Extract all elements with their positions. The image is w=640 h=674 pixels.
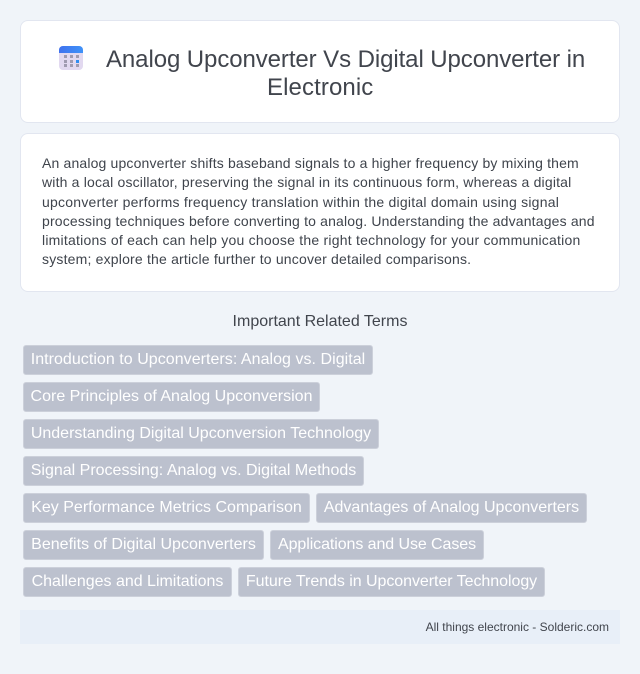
- tag: benefits digital: [23, 530, 264, 560]
- text block: description: limitations of each can help you choose the right technology for your communication: [42, 232, 581, 248]
- tag: performance metrics: [23, 493, 310, 523]
- tag: challenges: [23, 567, 232, 597]
- tag: digital upconversion: [23, 419, 379, 449]
- tag: digital upconversion: Understanding Digital Upconversion Technology: [31, 425, 371, 442]
- tag: future trends: Future Trends in Upconverter Technology: [246, 573, 537, 590]
- footer text: All things electronic - Solderic.com: [426, 620, 609, 634]
- tag: advantages analog: [316, 493, 587, 523]
- panel: title card: [20, 20, 620, 123]
- tag: future trends: [238, 567, 545, 597]
- tag: signal processing: [23, 456, 364, 486]
- tag: core principles: Core Principles of Analog Upconversion: [31, 388, 312, 405]
- tag: performance metrics: Key Performance Metrics Comparison: [31, 499, 302, 516]
- tag: applications: [270, 530, 484, 560]
- text block: description: An analog upconverter shifts baseband signals to a higher frequency by mixing them: [42, 155, 579, 171]
- footer bar: [20, 610, 620, 644]
- tag: introduction: Introduction to Upconverters: Analog vs. Digital: [31, 351, 365, 368]
- tag: applications: Applications and Use Cases: [278, 536, 476, 553]
- text block: description: [42, 155, 595, 267]
- tag: challenges: Challenges and Limitations: [32, 573, 223, 590]
- heading: title line 2: Electronic: [267, 74, 373, 101]
- panel: description card: [20, 133, 620, 292]
- text block: description: processing techniques before converting to analog. Understanding the advantages and: [42, 213, 595, 229]
- text block: description: upconverter performs frequency translation within the digital domain using signal: [42, 194, 559, 210]
- tag: signal processing: Signal Processing: Analog vs. Digital Methods: [31, 462, 356, 479]
- icon: calendar grid: [59, 46, 83, 70]
- text block: description: system; explore the article further to uncover detailed comparisons.: [42, 251, 471, 267]
- tag: core principles: [23, 382, 320, 412]
- tag: advantages analog: Advantages of Analog Upconverters: [324, 499, 579, 516]
- tag: introduction: [23, 345, 373, 375]
- heading: important related terms: Important Related Terms: [233, 313, 407, 330]
- text block: description: with a local oscillator, preserving the signal in its continuous form, whereas a digital: [42, 174, 571, 190]
- heading: title line 1: Analog Upconverter Vs Digital Upconverter in: [106, 46, 585, 73]
- tag: benefits digital: Benefits of Digital Upconverters: [31, 536, 256, 553]
